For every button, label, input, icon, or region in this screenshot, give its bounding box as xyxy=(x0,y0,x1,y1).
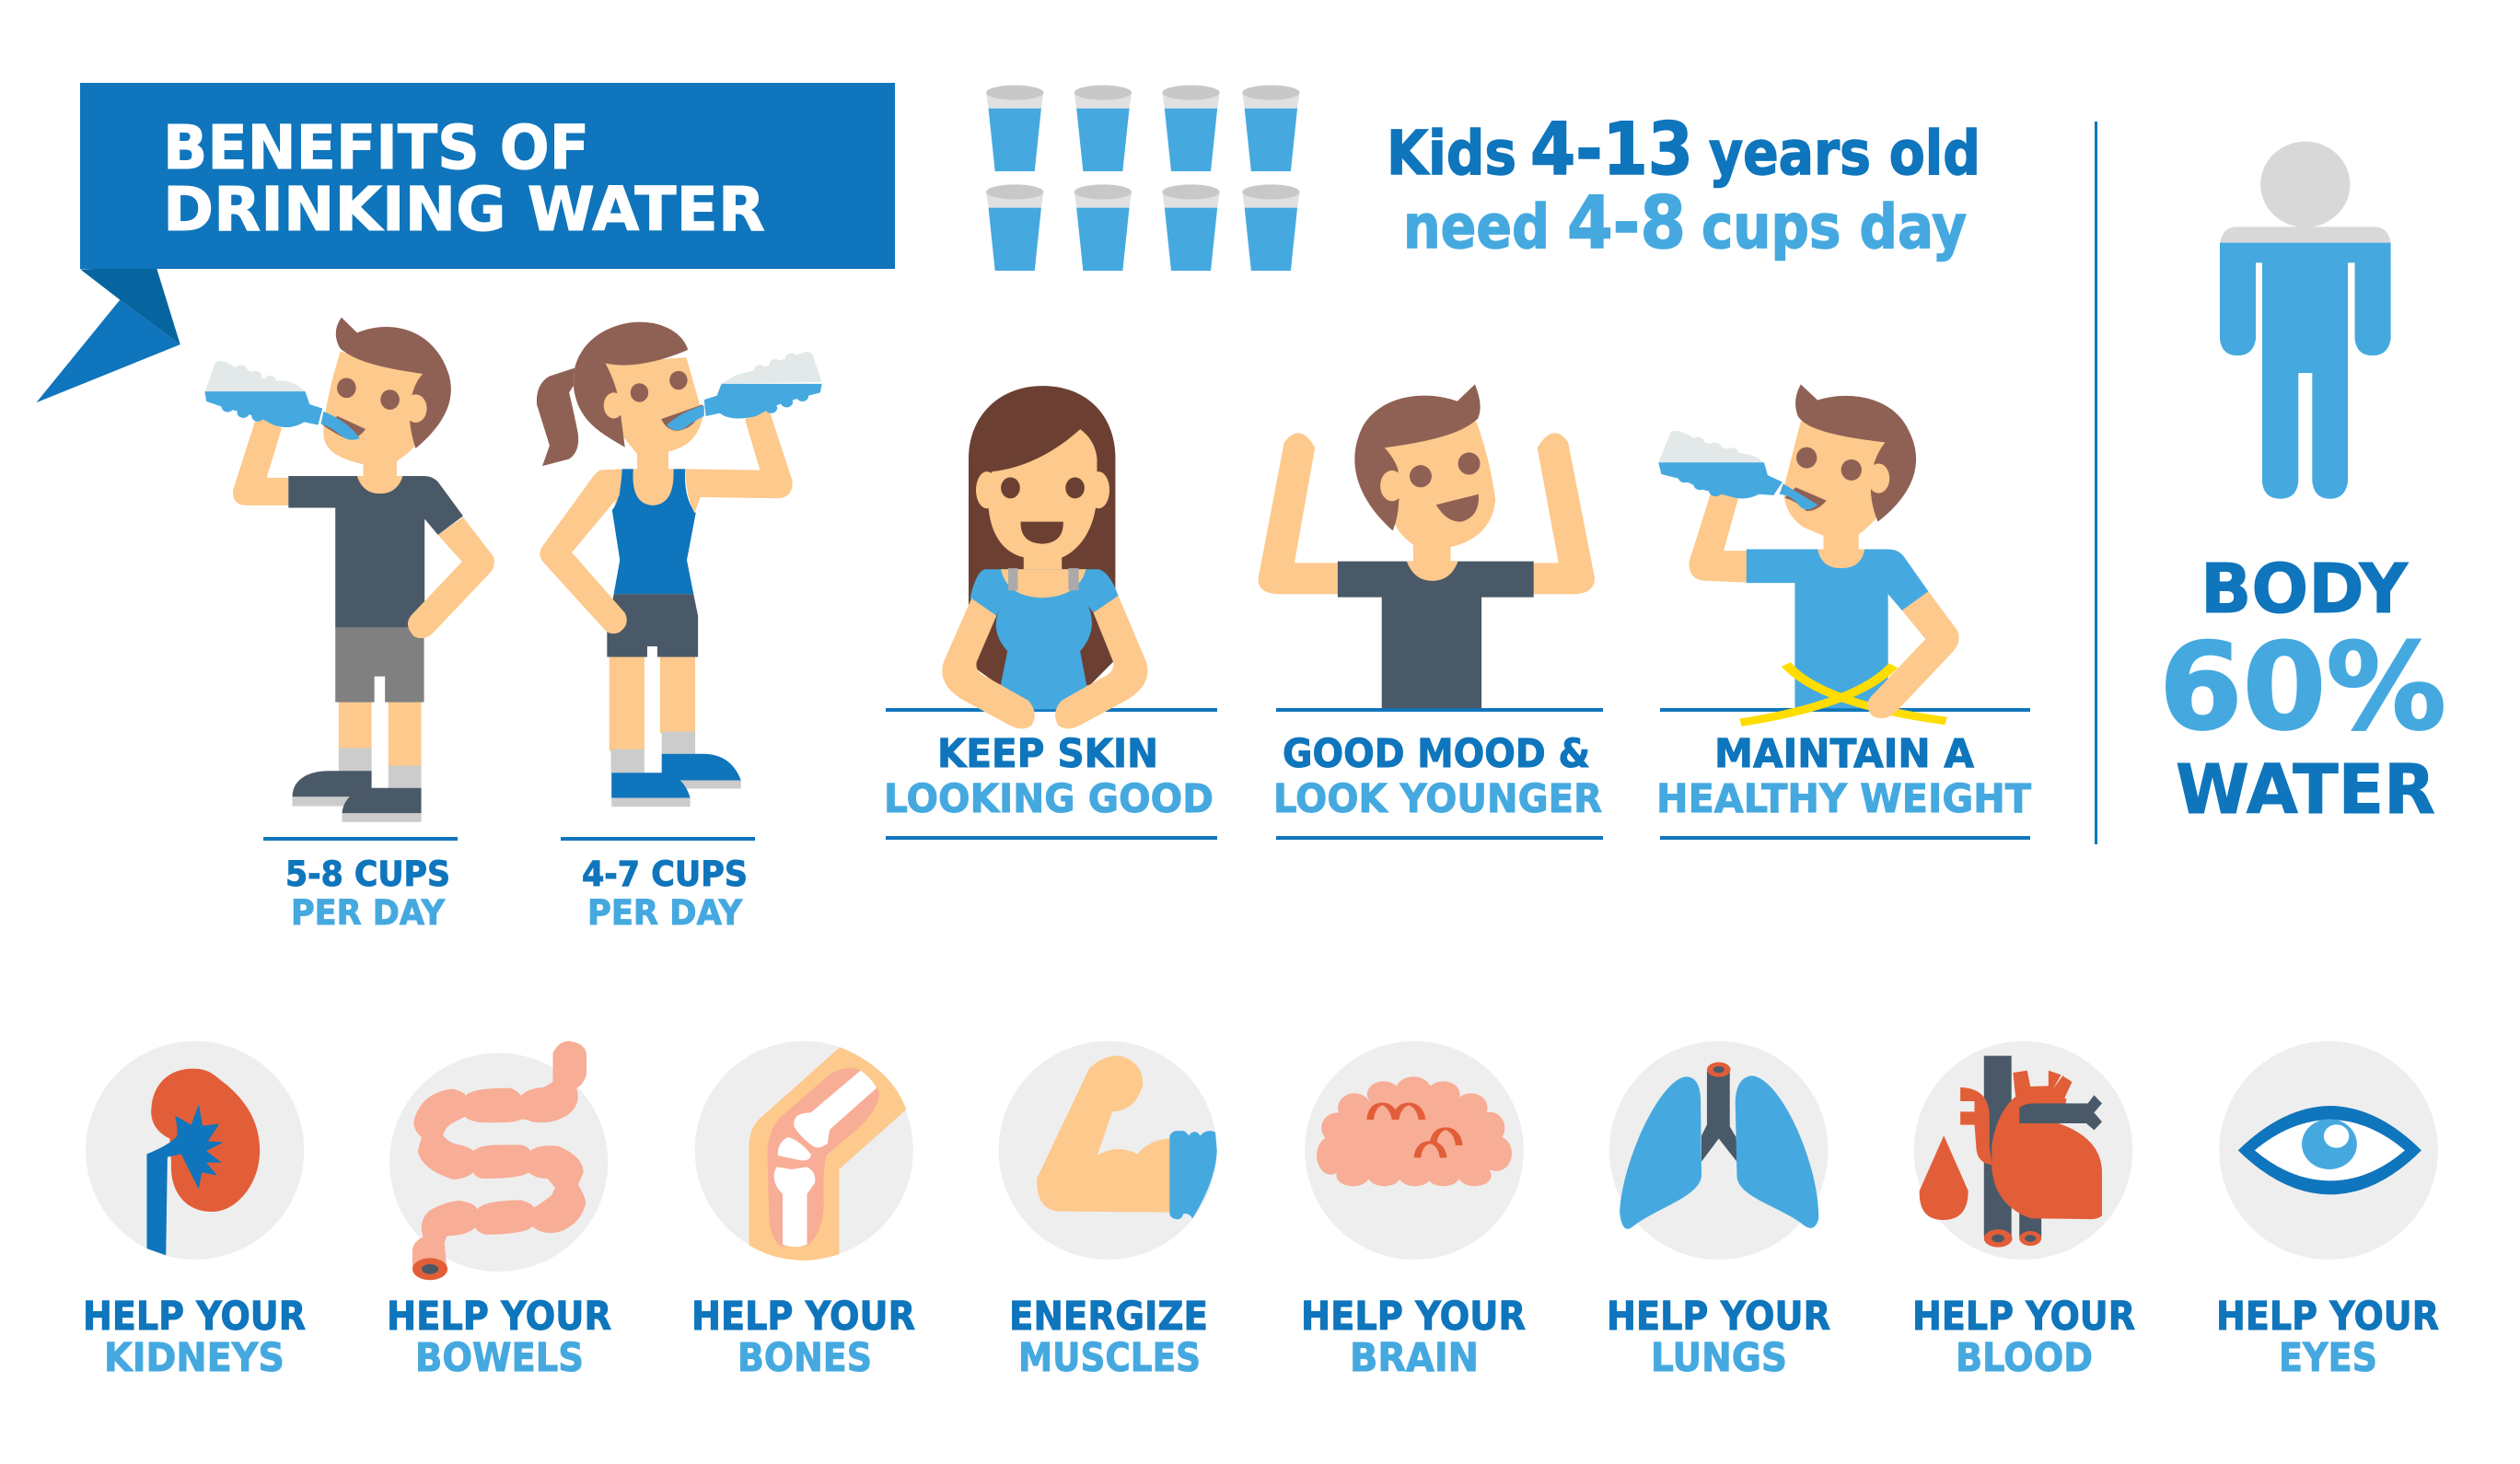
icon: brain xyxy=(1305,1041,1524,1260)
label: bones: BONES xyxy=(737,1335,872,1381)
icon: eight water glasses xyxy=(986,85,1299,271)
top divider line xyxy=(886,708,1217,712)
panel: girl drinking 4-7 cups xyxy=(537,322,822,933)
label: muscles: MUSCLES xyxy=(1018,1335,1201,1381)
icon: kidney xyxy=(86,1041,304,1260)
label: blood: BLOOD xyxy=(1956,1335,2093,1381)
5-8 cups label: 5-8 CUPS xyxy=(285,854,450,894)
label: eyes xyxy=(2216,1294,2439,1381)
boy figure xyxy=(204,318,494,822)
icon: lungs xyxy=(1609,1041,1829,1260)
icon: bowels xyxy=(389,1041,608,1280)
panel: maintain a healthy weight xyxy=(1656,384,2032,840)
label: bones: HELP YOUR xyxy=(691,1294,915,1340)
label: kidneys xyxy=(83,1294,306,1381)
top divider line xyxy=(1660,708,2030,712)
body stat: 60% xyxy=(2159,617,2446,757)
heading: kids water need: need xyxy=(1403,192,1550,262)
banner ribbon tail xyxy=(36,267,180,402)
label: MAINTAIN A xyxy=(1714,731,1975,777)
4-7 cups label: 4-7 CUPS xyxy=(582,854,748,894)
label: brain: BRAIN xyxy=(1350,1335,1479,1381)
label: LOOKING GOOD xyxy=(884,776,1214,822)
body stat: WATER xyxy=(2176,750,2435,830)
title: DRINKING WATER xyxy=(163,174,765,245)
4-7 cups label: PER DAY xyxy=(587,893,743,933)
title xyxy=(163,112,765,245)
icon: muscle xyxy=(999,1041,1217,1260)
label: bowels: HELP YOUR xyxy=(387,1294,611,1340)
label: bowels xyxy=(387,1294,611,1381)
label: HEALTHY WEIGHT xyxy=(1656,776,2032,822)
label: bones xyxy=(691,1294,915,1381)
organ row: left four xyxy=(83,1041,1217,1381)
heading: kids water need: 4-13 xyxy=(1530,109,1693,192)
bottom divider line xyxy=(1276,836,1603,840)
label: brain: HELP YOUR xyxy=(1301,1294,1526,1340)
organ row: right four xyxy=(1301,1041,2439,1381)
label: lungs: LUNGS xyxy=(1651,1335,1787,1381)
panel: body 60% water xyxy=(2159,142,2446,830)
cheering boy figure xyxy=(1259,384,1595,708)
body stat xyxy=(2159,550,2446,830)
label: eyes: HELP YOUR xyxy=(2216,1294,2439,1340)
organ icons: brain, lungs, blood, eyes xyxy=(1305,1041,2438,1260)
label: LOOK YOUNGER xyxy=(1273,776,1602,822)
bottom divider line xyxy=(886,836,1217,840)
label xyxy=(884,731,1214,822)
4-7 cups label xyxy=(582,854,748,933)
icon: eye xyxy=(2219,1041,2438,1260)
label: muscles: ENERGIZE xyxy=(1009,1294,1208,1340)
label: lungs xyxy=(1607,1294,1830,1381)
top divider line xyxy=(1276,708,1603,712)
label: kidneys: KIDNEYS xyxy=(104,1335,285,1381)
heading: kids water need: years old xyxy=(1709,118,1980,189)
organ icons: kidneys, bowels, bones, muscles xyxy=(86,1041,1217,1280)
smiling girl figure xyxy=(942,386,1147,728)
boy with measuring tape figure xyxy=(1658,384,1959,723)
glass row 2 xyxy=(986,184,1299,271)
title: BENEFITS OF xyxy=(163,112,589,183)
label: lungs: HELP YOUR xyxy=(1607,1294,1830,1340)
panel: boy drinking 5-8 cups xyxy=(204,318,494,933)
heading: kids water need xyxy=(1387,109,1980,265)
icon: heart and blood drop xyxy=(1914,1041,2132,1260)
label: bowels: BOWELS xyxy=(415,1335,584,1381)
heading: kids water need: Kids xyxy=(1387,118,1516,189)
label xyxy=(1273,731,1602,822)
label: eyes: EYES xyxy=(2279,1335,2377,1381)
label: GOOD MOOD & xyxy=(1283,731,1590,777)
title banner xyxy=(36,83,895,402)
label: muscles xyxy=(1009,1294,1208,1381)
icon: body silhouette xyxy=(2220,142,2391,499)
5-8 cups label xyxy=(285,854,450,933)
heading: kids water need: 4-8 xyxy=(1567,182,1686,265)
label: KEEP SKIN xyxy=(937,731,1158,777)
heading: kids water need: cups day xyxy=(1701,192,1967,262)
girl figure xyxy=(537,322,822,807)
panel: good mood and look younger xyxy=(1259,384,1603,840)
banner background xyxy=(80,83,895,269)
label xyxy=(1656,731,2032,822)
divider line xyxy=(561,837,755,841)
label: blood: HELP YOUR xyxy=(1912,1294,2135,1340)
body stat: BODY xyxy=(2201,550,2409,629)
label: kidneys: HELP YOUR xyxy=(83,1294,306,1340)
glass row 1 xyxy=(986,85,1299,171)
label: blood xyxy=(1912,1294,2135,1381)
label: brain xyxy=(1301,1294,1526,1381)
icon: bones xyxy=(695,1041,913,1261)
5-8 cups label: PER DAY xyxy=(291,893,446,933)
panel: keep skin looking good xyxy=(884,386,1217,840)
divider line xyxy=(263,837,458,841)
bottom divider line xyxy=(1660,836,2030,840)
